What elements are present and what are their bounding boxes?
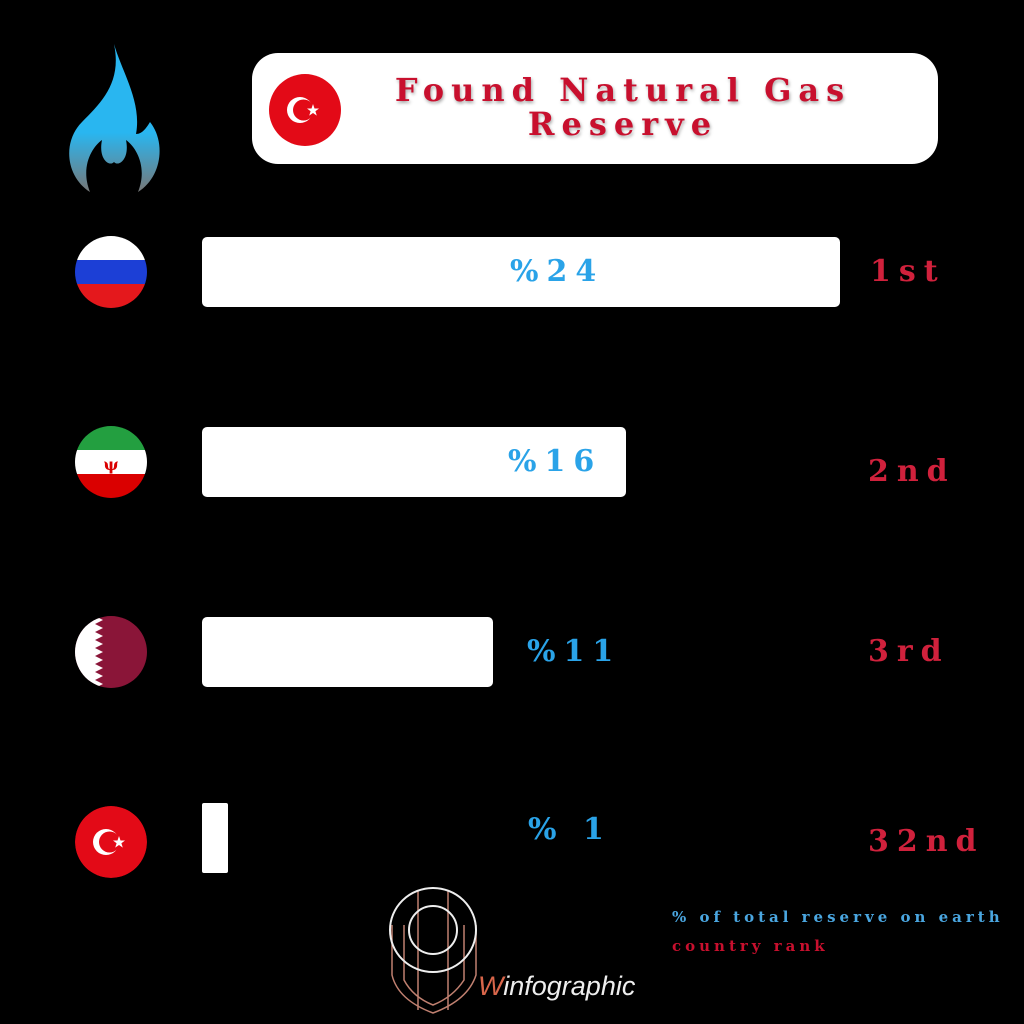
legend: country rank: [672, 937, 829, 955]
title: Found Natural Gas: [395, 71, 851, 109]
legend: [672, 908, 1004, 955]
icon: gas flame: [69, 44, 160, 192]
bar: russia: [202, 237, 840, 307]
logo: Winfographic: [478, 971, 635, 1001]
icon: turkey flag: [75, 806, 147, 878]
icon: russia flag: [75, 236, 147, 308]
value: iran: %16: [508, 444, 602, 479]
icon: iran flag: ψ: [103, 455, 119, 474]
bar: turkey: [202, 803, 228, 873]
rank: iran: 2nd: [868, 454, 956, 489]
logo: [389, 887, 636, 1014]
legend: % of total reserve on earth: [672, 908, 1004, 926]
icon: qatar flag: [75, 616, 147, 688]
value: russia: %24: [510, 254, 604, 289]
rank: qatar: 3rd: [868, 634, 950, 669]
title: [395, 71, 851, 143]
value: turkey: % 1: [528, 812, 612, 847]
icon: turkey flag header: [269, 74, 341, 146]
rank: turkey: 32nd: [868, 824, 985, 859]
bar: iran: [202, 427, 626, 497]
rank: russia: 1st: [870, 254, 946, 289]
title: Reserve: [528, 105, 718, 143]
value: qatar: %11: [527, 634, 621, 669]
header panel: [252, 53, 938, 164]
bar: qatar: [202, 617, 493, 687]
icon: iran flag: [75, 426, 147, 498]
